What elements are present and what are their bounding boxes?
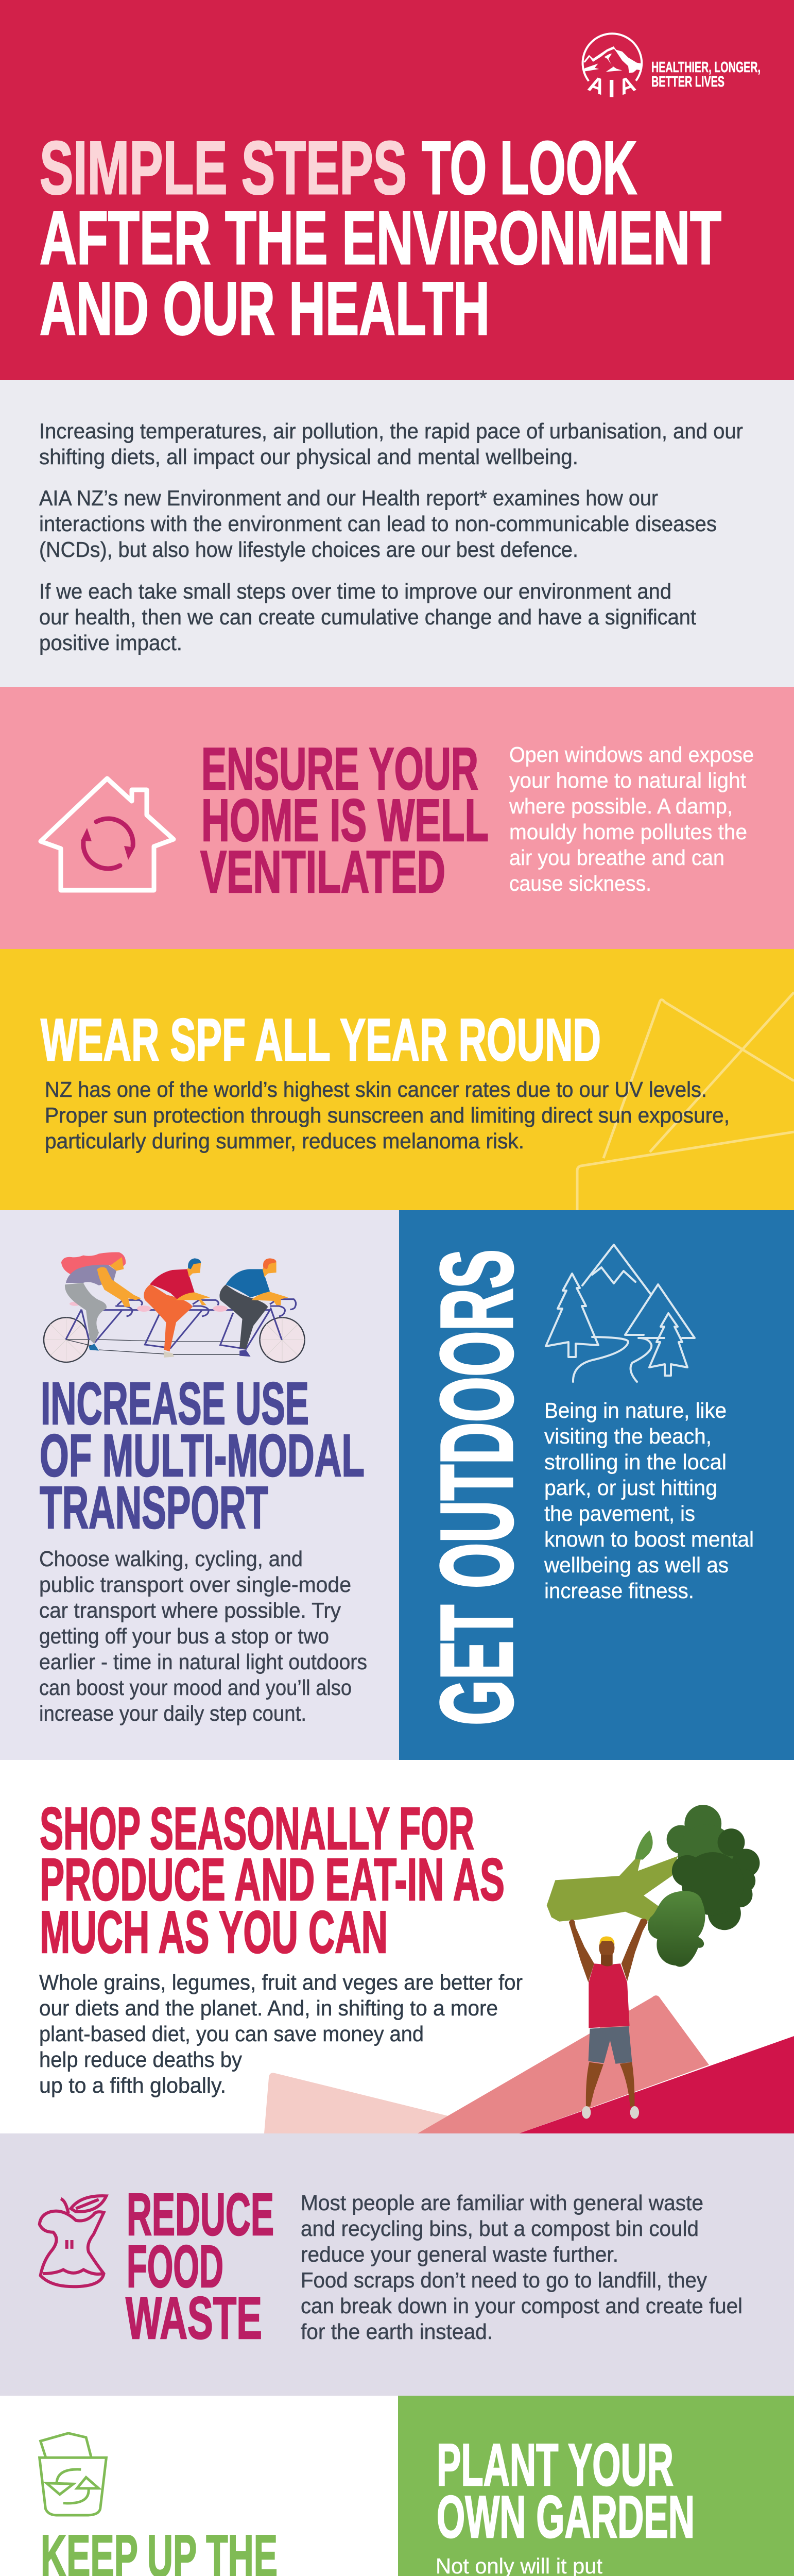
text block: transport advice: increase your daily step count. <box>39 1701 306 1725</box>
text block: plant-based diet: help reduce deaths by <box>39 2047 242 2072</box>
text block: plant-based diet: our diets and the planet. And, in shifting to a more <box>39 1996 498 2020</box>
logo: AIA with tagline <box>583 33 761 99</box>
title: TO LOOK <box>422 126 637 210</box>
icon: house with circular arrows <box>41 778 174 890</box>
decorative outline shapes <box>577 992 794 1210</box>
text block: outdoors advice: the pavement, is <box>544 1501 695 1526</box>
heading: ensure your home is well ventilated: VENTILATED <box>200 838 445 905</box>
heading: ensure your home is well ventilated: HOME IS WELL <box>201 787 489 854</box>
decorative triangles <box>264 1995 794 2133</box>
panel: title header <box>0 0 794 380</box>
illustration: three cyclists on a tandem bike <box>44 1252 305 1362</box>
text block: ventilation advice: where possible. A damp, <box>509 794 733 818</box>
tagline <box>651 59 761 90</box>
text block: transport advice: car transport where possible. Try <box>39 1598 341 1622</box>
text block: ventilation advice <box>509 742 754 895</box>
text block: compost advice: can break down in your compost and create fuel <box>301 2294 743 2318</box>
text block: ventilation advice: air you breathe and can <box>509 845 724 870</box>
title: SIMPLE STEPS <box>40 126 407 210</box>
heading: reduce food waste: REDUCE <box>127 2181 274 2248</box>
panel: shop seasonally <box>0 1760 794 2133</box>
text block: outdoors advice: wellbeing as well as <box>544 1553 729 1577</box>
tagline: BETTER LIVES <box>651 74 724 90</box>
cyclist three <box>219 1258 288 1357</box>
panel: plant your own garden <box>398 2396 794 2576</box>
heading: increase use of multi-modal transport: OF MULTI-MODAL <box>40 1422 365 1489</box>
icon: apple core <box>40 2196 106 2286</box>
icon: AIA logo: A <box>585 71 609 99</box>
heading: increase use of multi-modal transport <box>40 1370 365 1541</box>
text block: transport advice: Choose walking, cycling, and <box>39 1547 303 1571</box>
heading: reduce food waste: WASTE <box>126 2284 262 2351</box>
text block: sun protection: NZ has one of the world’s highest skin cancer rates due to our UV levels. <box>45 1077 707 1101</box>
heading: shop seasonally: MUCH AS YOU CAN <box>40 1899 388 1965</box>
text block: transport advice: getting off your bus a stop or two <box>39 1624 329 1648</box>
heading: keep up the recycling <box>41 2522 278 2576</box>
heading: plant your own garden <box>437 2431 695 2550</box>
text block: ventilation advice: mouldy home pollutes the <box>509 820 747 844</box>
panel: reduce food waste <box>0 2133 794 2396</box>
text block: intro: positive impact. <box>39 631 182 655</box>
icon: AIA logo: A <box>615 71 638 99</box>
icon: recycling bin <box>40 2433 106 2515</box>
text block: transport advice: public transport over single-mode <box>39 1572 351 1597</box>
text block: intro <box>39 419 743 655</box>
illustration: man lifting giant broccoli <box>547 1805 760 2119</box>
panel: keep up the recycling <box>0 2396 398 2576</box>
heading: reduce food waste: FOOD <box>127 2233 223 2300</box>
panel: ventilated home <box>0 687 794 949</box>
heading: shop seasonally <box>40 1795 505 1965</box>
text block: sun protection: Proper sun protection through sunscreen and limiting direct sun exposure, <box>45 1103 730 1127</box>
cyclist one <box>61 1252 141 1351</box>
text block: ventilation advice: your home to natural light <box>509 768 746 792</box>
panel: introduction <box>0 380 794 687</box>
text block: outdoors advice: increase fitness. <box>544 1579 694 1603</box>
text block: sun protection: particularly during summer, reduces melanoma risk. <box>45 1129 524 1153</box>
cyclist two <box>144 1258 210 1358</box>
text block: outdoors advice: known to boost mental <box>544 1527 754 1551</box>
icon: AIA logo <box>583 33 642 99</box>
panel: get outdoors <box>399 1210 794 1760</box>
panel: multi-modal transport <box>0 1210 399 1760</box>
text block: plant-based diet <box>39 1970 523 2097</box>
heading: increase use of multi-modal transport: INCREASE USE <box>41 1370 309 1437</box>
text block: outdoors advice: strolling in the local <box>544 1450 727 1474</box>
text block: sun protection <box>45 1077 730 1153</box>
text block: intro: Increasing temperatures, air pollution, the rapid pace of urbanisation, and our <box>39 419 743 443</box>
text block: ventilation advice: Open windows and expose <box>509 742 754 767</box>
text block: compost advice: Most people are familiar with general waste <box>301 2191 703 2215</box>
heading: ensure your home is well ventilated: ENSURE YOUR <box>201 735 478 802</box>
text block: transport advice: can boost your mood and you’ll also <box>39 1675 352 1700</box>
panel: wear SPF <box>0 949 794 1210</box>
text block: intro: shifting diets, all impact our physical and mental wellbeing. <box>39 445 578 469</box>
text block: plant-based diet: up to a fifth globally. <box>39 2073 226 2097</box>
text block: transport advice: earlier - time in natural light outdoors <box>39 1650 367 1674</box>
text block: compost advice: for the earth instead. <box>301 2319 493 2344</box>
heading: shop seasonally: PRODUCE AND EAT-IN AS <box>40 1846 505 1913</box>
text block: outdoors advice <box>544 1398 754 1603</box>
text block: plant-based diet: Whole grains, legumes, fruit and veges are better for <box>39 1970 523 1994</box>
icon: mountains, trees and river <box>546 1245 695 1382</box>
heading: increase use of multi-modal transport: TRANSPORT <box>40 1474 268 1541</box>
heading: reduce food waste <box>126 2181 274 2351</box>
heading: shop seasonally: SHOP SEASONALLY FOR <box>40 1795 474 1862</box>
text block: outdoors advice: visiting the beach, <box>544 1424 712 1448</box>
title <box>40 126 721 350</box>
text block: intro: our health, then we can create cumulative change and have a significant <box>39 605 696 629</box>
text block: intro: (NCDs), but also how lifestyle choices are our best defence. <box>39 537 578 562</box>
text block: compost advice <box>301 2191 743 2344</box>
title: AND OUR HEALTH <box>40 266 490 350</box>
text block: ventilation advice: cause sickness. <box>509 871 651 895</box>
heading: get outdoors (vertical): GET OUTDOORS <box>420 1249 533 1725</box>
text block: compost advice: Food scraps don’t need to go to landfill, they <box>301 2268 707 2292</box>
text block: transport advice <box>39 1547 367 1725</box>
text block: intro: If we each take small steps over time to improve our environment and <box>39 579 671 603</box>
text block: compost advice: and recycling bins, but a compost bin could <box>301 2216 699 2241</box>
text block: intro: AIA NZ’s new Environment and our Health report* examines how our <box>39 486 658 510</box>
text block: intro: interactions with the environment can lead to non-communicable diseases <box>39 512 717 536</box>
text block: compost advice: reduce your general waste further. <box>301 2242 618 2266</box>
text block: plant-based diet: plant-based diet, you can save money and <box>39 2022 424 2046</box>
heading: ensure your home is well ventilated <box>200 735 489 905</box>
text block: outdoors advice: park, or just hitting <box>544 1476 717 1500</box>
text block: outdoors advice: Being in nature, like <box>544 1398 727 1422</box>
